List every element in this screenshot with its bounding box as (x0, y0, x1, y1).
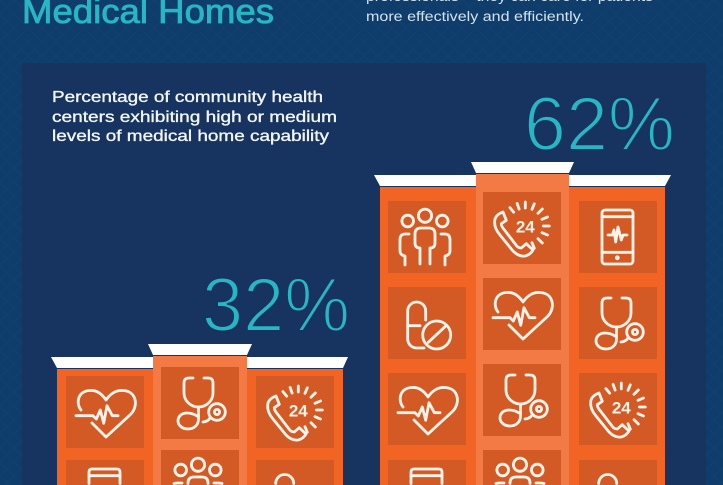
tile: tablet (388, 460, 466, 485)
chart description (52, 89, 337, 145)
intro text (366, 0, 653, 24)
tile: 24-hour phone: 24 (289, 402, 308, 420)
statistic: 62%: 62% (524, 82, 675, 167)
tile: 24-hour phone (483, 192, 561, 264)
tile: tablet (66, 460, 144, 485)
tile: 24-hour phone (256, 376, 334, 448)
building: 62% (374, 162, 671, 485)
tile: stethoscope (579, 287, 657, 359)
tile: people (161, 450, 239, 485)
statistic: 32%: 32% (202, 263, 350, 348)
intro text: more effectively and efficiently. (366, 9, 584, 24)
tile: stethoscope (161, 367, 239, 439)
tile: 24-hour phone: 24 (516, 218, 535, 236)
tile: stethoscope (483, 364, 561, 436)
tile: pill (579, 460, 657, 485)
tile: tablet (579, 201, 657, 273)
tile: heart (483, 278, 561, 350)
tile: people (388, 201, 466, 273)
tile: people (483, 450, 561, 485)
chart description: levels of medical home capability (52, 128, 329, 145)
building: 32% (51, 344, 348, 485)
tile: pill (388, 287, 466, 359)
chart description: Percentage of community health (52, 89, 323, 106)
chart description: centers exhibiting high or medium (52, 109, 337, 126)
tile: 24-hour phone (579, 373, 657, 445)
tile: pill (256, 460, 334, 485)
tile: 24-hour phone: 24 (612, 398, 631, 418)
tile: heart (388, 373, 466, 445)
tile: heart (66, 376, 144, 448)
